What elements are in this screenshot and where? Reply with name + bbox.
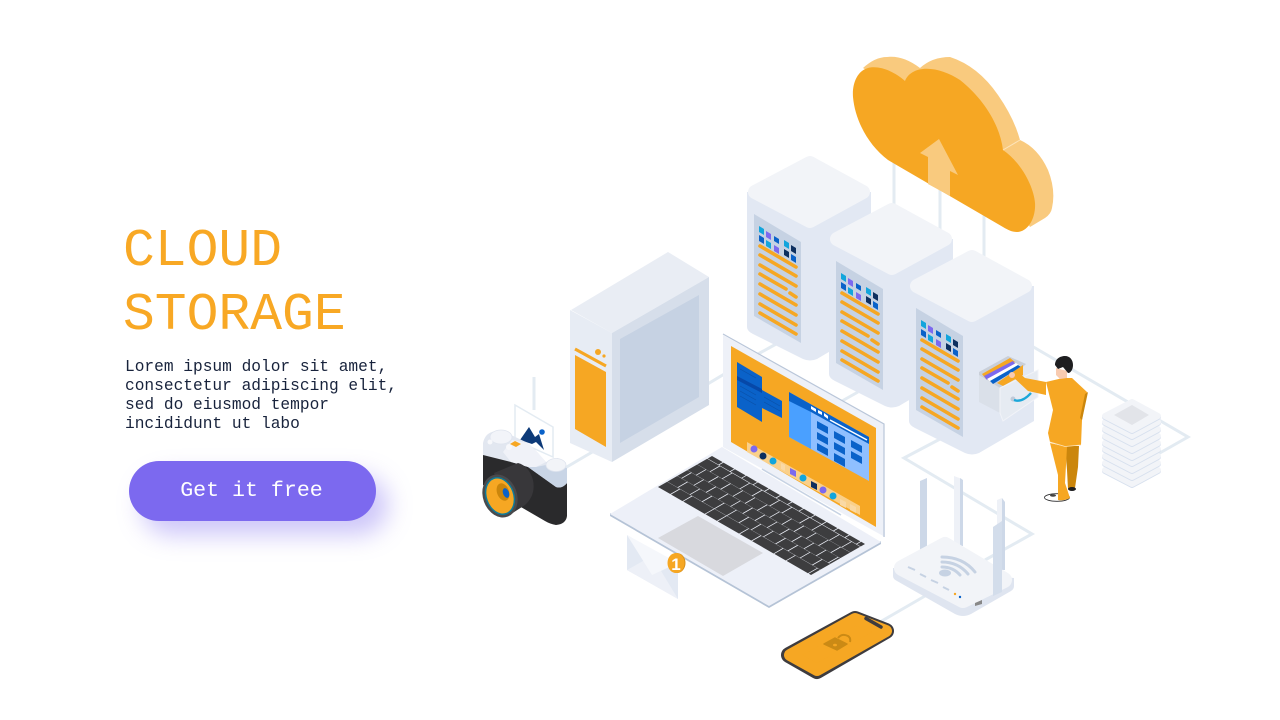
shoe xyxy=(1044,494,1070,501)
laptop lid xyxy=(723,334,885,537)
description text: Lorem ipsum dolor sit amet, xyxy=(125,358,387,376)
laptop base xyxy=(610,513,881,608)
envelope with notification xyxy=(627,535,686,599)
picture card xyxy=(515,405,553,457)
hand xyxy=(1009,372,1015,378)
hair xyxy=(1055,356,1073,373)
person xyxy=(1009,356,1088,501)
tower computer xyxy=(570,252,709,462)
front leg xyxy=(1050,443,1070,500)
dark blue window xyxy=(737,362,782,422)
sleeve shadow xyxy=(1080,392,1088,420)
back antennas xyxy=(920,478,927,550)
description text: incididunt ut labo xyxy=(125,415,300,433)
router body xyxy=(893,568,1014,616)
arm xyxy=(1012,372,1046,395)
head xyxy=(1056,368,1067,379)
call to action button xyxy=(129,461,376,521)
description text: consectetur adipiscing elit, xyxy=(125,377,397,395)
notification badge: 1 xyxy=(671,555,681,574)
jacket xyxy=(1046,378,1087,447)
laptop screen xyxy=(731,346,876,527)
mountains xyxy=(520,427,544,450)
description text xyxy=(125,358,397,433)
server rack 3 xyxy=(909,257,1034,454)
camera xyxy=(477,430,567,525)
back leg xyxy=(1065,446,1079,489)
title: CLOUD xyxy=(123,221,282,281)
cloud with upload arrow xyxy=(853,57,1053,232)
server rack 2 xyxy=(829,210,953,408)
smartphone xyxy=(789,618,886,671)
light blue window xyxy=(789,392,869,481)
description text: sed do eiusmod tempor xyxy=(125,396,329,414)
camera lens xyxy=(477,463,534,522)
upload arrow xyxy=(920,139,958,196)
indicators xyxy=(908,567,949,590)
file drawer xyxy=(979,356,1038,421)
server rack 1 xyxy=(747,163,871,360)
title: STORAGE xyxy=(123,285,346,345)
wifi symbol xyxy=(939,557,975,576)
title xyxy=(123,221,346,345)
call to action button: Get it free xyxy=(180,479,323,503)
lock icon xyxy=(824,635,850,650)
laptop xyxy=(610,334,885,608)
front antenna xyxy=(993,521,1002,596)
app dock xyxy=(747,442,860,515)
keyboard xyxy=(663,457,863,572)
router xyxy=(893,476,1014,616)
trackpad xyxy=(658,516,763,576)
disk stack xyxy=(1105,402,1158,485)
